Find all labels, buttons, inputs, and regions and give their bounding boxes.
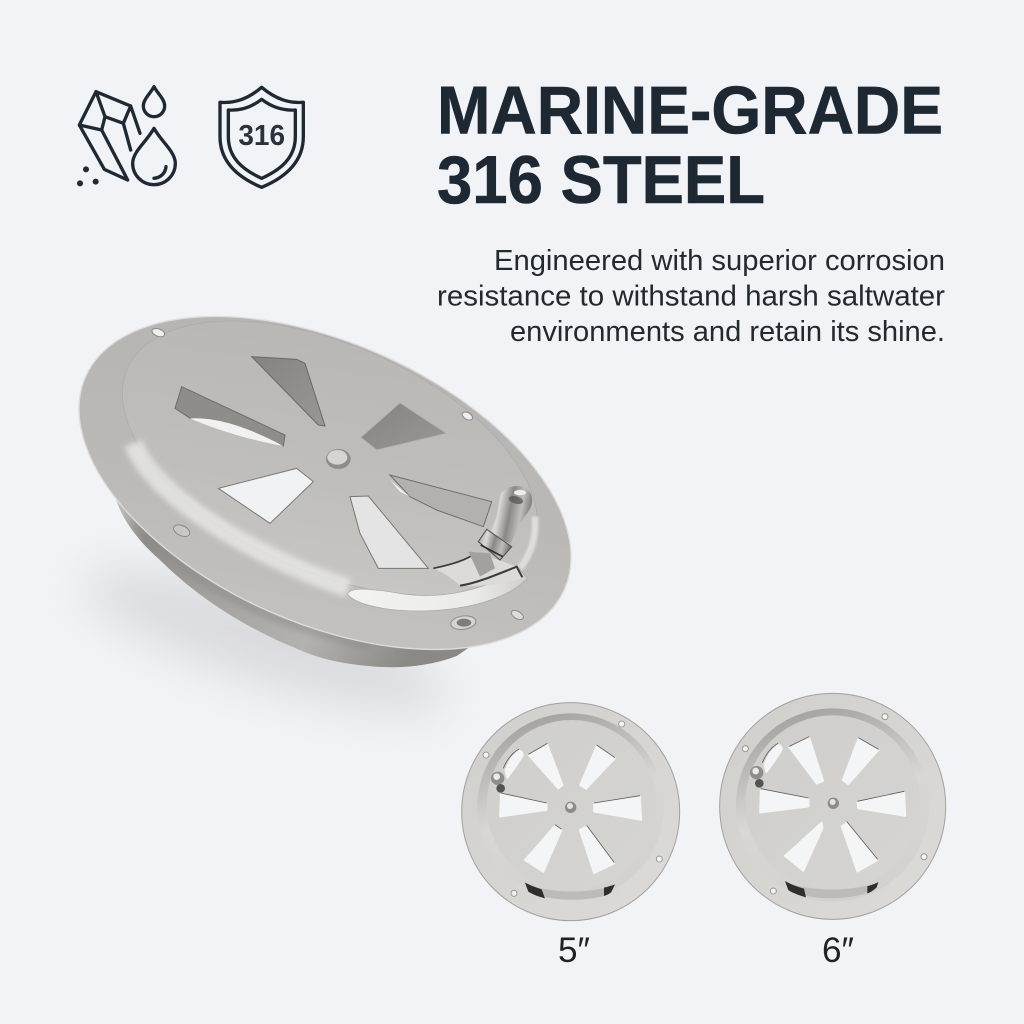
title: 316 STEEL [437,142,765,218]
vent slot top [252,357,325,426]
title: MARINE-GRADE [437,72,943,148]
vent slot lower left [218,468,313,523]
icon: 316 shield [220,87,303,187]
6 inch mounting holes [742,714,927,894]
vent slot upper right [361,403,447,450]
5 inch centre rivet [565,802,576,813]
5 inch knob [491,772,505,793]
vent knob [478,486,532,560]
description text [437,245,946,348]
6 inch vent [720,693,946,919]
vent rim shine [347,568,527,611]
6 inch knob [750,766,764,788]
vent dish [81,265,579,652]
6 inch slot edges [761,737,904,859]
5 inch mounting holes [483,721,662,896]
vent centre rivet [326,449,351,469]
vent rim highlight band [133,443,348,588]
6 inch dish face [745,715,920,890]
vent slot right [390,475,492,527]
vent curved lever slot [433,552,522,586]
5 inch vent [462,703,680,921]
6 inch centre rivet [828,798,839,809]
size label 5 inch: 5″ [558,931,590,970]
description text: Engineered with superior corrosion [494,245,945,277]
5 inch dish rim [477,713,664,900]
6 inch rim reflection [785,881,878,898]
icon: crystal with water drops [77,87,175,186]
vent flange [29,249,621,717]
6 inch slots [760,738,905,872]
5 inch rim reflection [525,883,615,900]
description text: resistance to withstand harsh saltwater [437,280,946,312]
icon: 316 shield: 316 [238,120,285,152]
6 inch flange [720,693,946,919]
vent bowl [113,487,480,667]
vent slot lower middle [350,496,428,568]
5 inch flange [462,703,680,921]
vent right rim reflection [520,517,535,568]
title [437,72,943,218]
description text: environments and retain its shine. [510,316,945,348]
vent mounting holes [151,327,525,631]
large vent product photo [29,249,621,717]
vent bowl dark band [137,520,370,645]
6 inch dish rim [736,708,929,902]
vent slot left [175,387,285,446]
size label 6 inch: 6″ [822,931,854,970]
5 inch slots [500,744,641,873]
5 inch slot edges [501,743,640,863]
product shadow [71,541,459,739]
5 inch dish face [487,720,657,890]
